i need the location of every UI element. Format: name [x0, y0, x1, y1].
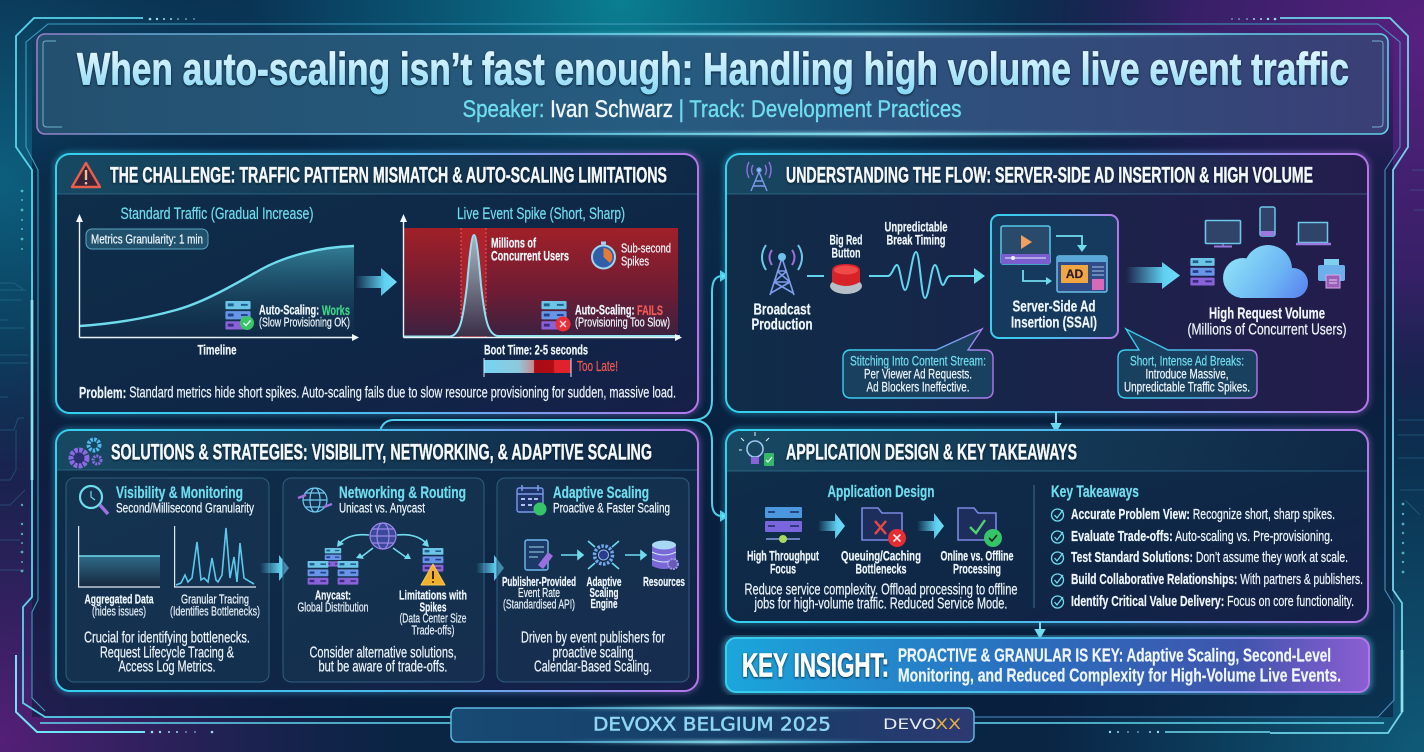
callout: short ad breaks: Short, Intense Ad Breaks:: [1130, 354, 1244, 368]
takeaway list: Build Collaborative Relationships: With partners & publishers.: [1071, 572, 1363, 588]
callout: short ad breaks: [1118, 329, 1257, 398]
step labels: Publisher-Provided: [502, 575, 576, 589]
step labels: (Standardised API): [503, 596, 575, 612]
network labels: Limitations with: [399, 588, 467, 602]
timeline label: Timeline: [198, 342, 237, 358]
subheading: application design: Application Design: [828, 483, 934, 501]
chart: granular tracing: [175, 526, 256, 587]
sub-panel: networking and routing: [283, 478, 484, 682]
SSAI label: Insertion (SSAI): [1011, 314, 1097, 332]
auto-scaling works label: Auto-Scaling: Works: [259, 302, 350, 318]
body text: Crucial for identifying bottlenecks.: [84, 630, 250, 646]
takeaway list: Test Standard Solutions: Don’t assume they work at scale.: [1071, 550, 1348, 566]
takeaway list: Identify Critical Value Delivery: Focus on core functionality.: [1071, 594, 1354, 610]
subheading: Second/Millisecond Granularity: [116, 500, 254, 516]
auto-scaling fails label: Auto-Scaling: FAILS: [575, 302, 663, 318]
auto-scaling fails label: [575, 302, 670, 330]
button label: [830, 232, 862, 260]
key insight text: [898, 644, 1341, 686]
body text: proactive scaling: [552, 644, 634, 662]
waveform arrow: [869, 252, 985, 298]
SSAI label: [1011, 298, 1097, 332]
body text: Calendar-Based Scaling.: [534, 658, 652, 676]
takeaway list: Evaluate Trade-offs: Auto-scaling vs. Pre-provisioning.: [1071, 529, 1333, 545]
icon: antenna: [747, 162, 771, 191]
panel: understanding the flow: [726, 154, 1368, 412]
subheading: Unicast vs. Anycast: [339, 500, 425, 516]
step labels: Adaptive: [586, 575, 622, 589]
broadcast label: [752, 302, 812, 334]
connector: [807, 275, 824, 277]
volume label: High Request Volume: [1209, 306, 1325, 322]
icon: printer: [1318, 259, 1345, 288]
icon: video player: [1001, 226, 1050, 264]
arrow: [625, 551, 646, 559]
callout: stitching: Stitching Into Content Stream:: [850, 354, 986, 368]
millions label: [491, 236, 569, 264]
chart labels: (Identifies Bottlenecks): [170, 604, 260, 618]
arrow: design to insight: [1036, 622, 1044, 637]
body text: but be aware of trade-offs.: [318, 658, 448, 676]
metrics granularity pill: Metrics Granularity: 1 min: [91, 232, 203, 246]
callout: short ad breaks: Introduce Massive,: [1146, 366, 1228, 382]
icon: ad panel: AD: [1066, 267, 1083, 281]
body text: Access Log Metrics.: [118, 658, 216, 676]
conference name: DEVOXX BELGIUM 2025: [593, 714, 831, 736]
icon: cloud: [1223, 245, 1308, 298]
arrow: [355, 268, 397, 296]
icon: server: [1190, 258, 1215, 286]
arrow: [260, 555, 289, 581]
body text: Consider alternative solutions,: [310, 644, 456, 662]
broadcast label: Production: [752, 316, 812, 334]
millions label: Millions of: [491, 236, 536, 250]
sub-second label: Sub-second: [621, 240, 671, 256]
sub-second label: [621, 240, 671, 268]
panel: the challenge: [56, 154, 698, 413]
sub-panel: visibility and monitoring: [66, 478, 269, 682]
callout: stitching: Per Viewer Ad Requests.: [864, 366, 972, 382]
icon: server with failure: [541, 301, 570, 332]
network labels: Global Distribution: [298, 600, 368, 614]
icon: server with check: [225, 301, 254, 330]
body text: Driven by event publishers for: [521, 630, 665, 646]
icon: laptop: [1296, 222, 1331, 244]
body text: [521, 630, 665, 676]
body text: [744, 582, 1018, 612]
step labels: Resources: [643, 575, 685, 589]
devoxx logo: DEVO XX: [883, 717, 962, 733]
body text: jobs for high-volume traffic. Reduced Service Mode.: [754, 596, 1008, 612]
heading: Adaptive Scaling: [553, 484, 649, 502]
timing label: Unpredictable: [884, 220, 948, 234]
chart title: Standard Traffic (Gradual Increase): [120, 205, 314, 223]
panel: application design and key takeaways: [726, 430, 1368, 622]
button label: Button: [832, 246, 860, 260]
arrow: [1126, 262, 1180, 289]
boot time bar: [484, 342, 618, 377]
icon: warning: [421, 564, 445, 585]
icon: stopwatch: [592, 242, 615, 268]
timing label: Break Timing: [886, 232, 946, 248]
icon: calendar: [517, 485, 546, 516]
chart labels: Aggregated Data: [84, 592, 154, 606]
icon: warning triangle: [72, 163, 100, 187]
icon: globe with arrows: [298, 488, 332, 512]
callout: stitching: [843, 329, 993, 398]
subheading: Proactive & Faster Scaling: [553, 500, 670, 516]
SSAI box: [991, 215, 1118, 338]
step labels: Processing: [953, 562, 1001, 576]
body text: Reduce service complexity. Offload processing to offline: [744, 582, 1018, 598]
icon: document: [525, 540, 553, 570]
chart: aggregated data: [79, 526, 160, 587]
icon: database: [652, 540, 678, 569]
arrow: [917, 513, 944, 539]
network labels: [298, 588, 467, 638]
icon: broadcast tower: [762, 245, 802, 295]
heading: Networking & Routing: [339, 484, 466, 502]
arrow: [818, 513, 845, 539]
auto-scaling fails label: (Provisioning Too Slow): [575, 314, 670, 330]
chart: standard traffic: [76, 205, 359, 358]
callout: stitching: Ad Blockers Ineffective.: [866, 380, 970, 394]
arrow: [476, 555, 504, 581]
subheading: key takeaways: Key Takeaways: [1051, 483, 1139, 501]
network labels: Trade-offs): [412, 622, 454, 638]
takeaway list: [1052, 507, 1363, 610]
body text: [84, 630, 250, 676]
step labels: Scaling: [590, 586, 618, 600]
button label: Big Red: [830, 232, 862, 248]
heading: THE CHALLENGE: TRAFFIC PATTERN MISMATCH & AUTO-SCALING LIMITATIONS: [110, 162, 667, 188]
network labels: Spikes: [420, 600, 446, 614]
volume label: [1188, 306, 1346, 338]
network labels: Anycast:: [315, 588, 351, 602]
arrow: [561, 551, 583, 559]
step labels: Engine: [590, 597, 618, 611]
body text: [310, 644, 456, 676]
sub-second label: Spikes: [621, 254, 649, 268]
timing label: [884, 220, 948, 248]
key insight label: KEY INSIGHT:: [742, 646, 889, 684]
problem statement: Problem: Standard metrics hide short spikes. Auto-scaling fails due to slow resource provisioning for sudden, massive load.: [79, 384, 676, 402]
icon: monitor: [1206, 220, 1240, 246]
chart labels: (hides issues): [92, 604, 146, 618]
icon: folder with x: [862, 508, 906, 547]
heading: SOLUTIONS & STRATEGIES: VISIBILITY, NETWORKING, & ADAPTIVE SCALING: [111, 440, 652, 464]
icon: phone: [1260, 207, 1275, 236]
heading: APPLICATION DESIGN & KEY TAKEAWAYS: [786, 440, 1077, 464]
panel: solutions and strategies: [56, 430, 698, 691]
icon: magnifier clock: [80, 486, 108, 514]
network labels: (Data Center Size: [400, 610, 466, 626]
SSAI label: Server-Side Ad: [1012, 298, 1096, 316]
icon: scaling engine: [588, 541, 619, 569]
chart labels: Granular Tracing: [181, 592, 249, 606]
icon: high throughput server: [765, 507, 802, 543]
icon: lightbulb: [739, 432, 774, 466]
millions label: Concurrent Users: [491, 248, 569, 264]
step labels: [502, 575, 685, 612]
broadcast label: Broadcast: [754, 302, 811, 318]
connector lines: [380, 272, 727, 520]
key insight banner: [726, 638, 1369, 692]
volume label: (Millions of Concurrent Users): [1188, 322, 1346, 338]
body text: Request Lifecycle Tracing &: [100, 644, 234, 662]
step labels: [747, 548, 1014, 576]
title banner: [37, 34, 1388, 134]
metrics granularity pill: [86, 229, 208, 249]
chart: live event spike: [400, 205, 682, 377]
takeaway list: Accurate Problem View: Recognize short, sharp spikes.: [1071, 507, 1335, 523]
auto-scaling works label: [259, 302, 350, 330]
chart labels: [84, 592, 260, 618]
auto-scaling works label: (Slow Provisioning OK): [259, 314, 350, 330]
icon: gears: [71, 440, 101, 466]
boot time bar: Boot Time: 2-5 seconds: [484, 342, 588, 358]
step labels: Bottlenecks: [856, 562, 906, 576]
icon: big red button: [830, 264, 862, 294]
sub-panel: adaptive scaling: [497, 478, 689, 682]
step labels: Queuing/Caching: [841, 548, 921, 564]
arrow: flow to design: [1052, 412, 1060, 431]
step labels: Event Rate: [518, 586, 560, 600]
boot time bar: Too Late!: [577, 359, 618, 375]
flow arrows: [1023, 236, 1082, 281]
chart title: Live Event Spike (Short, Sharp): [457, 205, 625, 223]
heading: Visibility & Monitoring: [116, 484, 243, 502]
footer: [451, 708, 974, 742]
network diagram: [308, 523, 445, 585]
step labels: High Throughput: [747, 548, 819, 564]
icon: folder with check: [958, 508, 1002, 547]
speaker and track: Speaker: Ivan Schwarz | Track: Development Practices: [462, 96, 962, 122]
step labels: Focus: [770, 562, 796, 576]
callout: short ad breaks: Unpredictable Traffic Spikes.: [1124, 380, 1250, 394]
step labels: Online vs. Offline: [940, 548, 1014, 564]
